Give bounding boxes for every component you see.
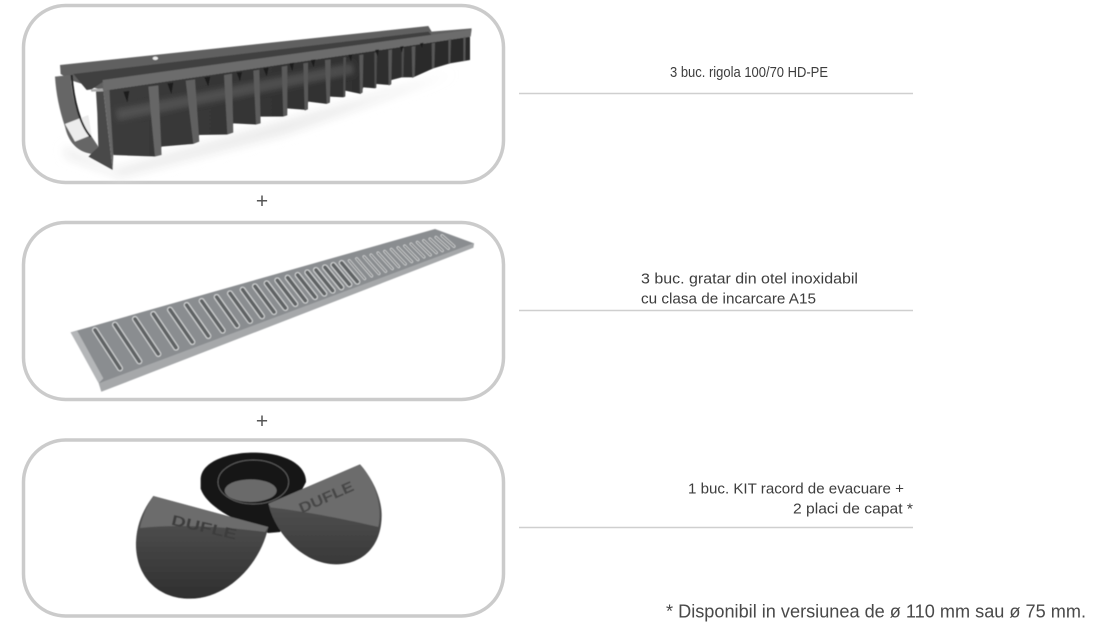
plus sign 1: +	[256, 190, 268, 213]
callout: kit description: 1 buc. KIT racord de evacuare +	[688, 482, 904, 498]
callout: grate description: 3 buc. gratar din otel inoxidabil	[641, 272, 858, 288]
callout: grate description	[519, 272, 913, 310]
image: outlet ring and two end caps: DUFLE	[170, 513, 239, 544]
panel: outlet kit and end caps	[24, 440, 504, 616]
image: outlet ring and two end caps: DUFLE	[297, 479, 357, 517]
callout: kit description: 2 placi de capat *	[793, 502, 913, 518]
image: stainless steel grate	[71, 229, 474, 392]
plus sign 2: +	[256, 410, 268, 433]
panel: channel	[24, 6, 504, 182]
image: drainage channel	[55, 26, 472, 177]
footnote: * Disponibil in versiunea de ø 110 mm sau ø 75 mm.	[666, 602, 1086, 622]
panel: grate	[24, 222, 504, 400]
callout: kit description	[519, 482, 913, 528]
image: outlet ring and two end caps	[136, 453, 382, 599]
callout: grate description: cu clasa de incarcare A15	[641, 292, 816, 308]
callout: channel description: 3 buc. rigola 100/70 HD-PE	[670, 65, 828, 81]
